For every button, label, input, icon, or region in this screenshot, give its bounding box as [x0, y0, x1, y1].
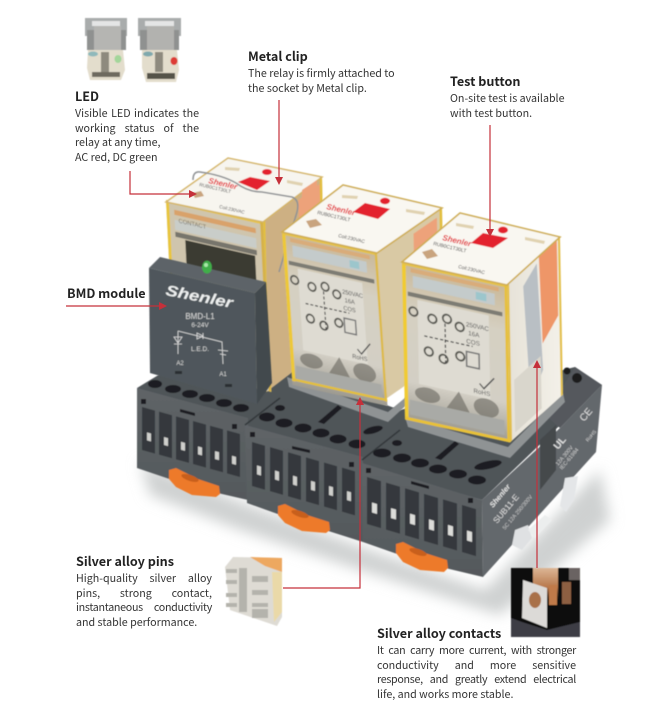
- relay 3 (front): RUB0C1T30LT: [433, 241, 467, 255]
- callout: silver alloy contacts: [377, 623, 576, 702]
- callout: BMD module: BMD module: [67, 283, 146, 302]
- BMD module: [149, 257, 272, 404]
- relay 3 front: RoHS: [473, 388, 490, 398]
- LED photos: green and red indicator relays: [85, 18, 181, 82]
- relay 3 (front): [402, 213, 565, 458]
- arrow: BMD module: [66, 302, 167, 310]
- callout: silver alloy pins: High-quality silver alloy: [76, 571, 212, 586]
- arrow: metal clip: [275, 100, 283, 185]
- relay 3 (front): Coil:230VAC: [458, 264, 486, 276]
- relay 2 (middle): RUB0C1T30LT: [317, 210, 351, 224]
- callout: LED: working status of the: [75, 121, 199, 136]
- callout: LED: Visible LED indicates the: [75, 106, 199, 121]
- BMD side: [255, 282, 272, 404]
- socket right side: CE: [578, 406, 595, 424]
- silver pins photo: [225, 557, 282, 626]
- callout: LED: relay at any time,: [75, 135, 161, 150]
- relay 2 (middle): [282, 185, 445, 422]
- white DIN rail clip: [512, 476, 578, 550]
- relay 2 front: 250VAC: [342, 289, 364, 300]
- relay 1 (back): Coil:230VAC: [219, 204, 246, 215]
- BMD printed labels: A1: [219, 372, 227, 378]
- module 1 front: [137, 380, 249, 500]
- relay 2 side: [377, 208, 445, 403]
- relay 2 front: [282, 232, 388, 406]
- socket right side: UL: [552, 435, 569, 452]
- soft ground shadow: [140, 462, 610, 615]
- socket top surface: [137, 367, 602, 500]
- callout: metal clip: The relay is firmly attached to: [248, 66, 395, 81]
- callout: silver alloy pins: Silver alloy pins: [76, 551, 174, 570]
- metal retaining clip: [193, 172, 298, 272]
- socket right side: 12A 300V: [555, 445, 575, 467]
- socket right side: RoHS: [585, 429, 599, 443]
- callout: metal clip: Metal clip: [248, 46, 308, 65]
- relay 1 front: CONTACT: [178, 219, 207, 231]
- callout: test button: On-site test is available: [450, 91, 565, 106]
- silver contacts photo: [511, 568, 580, 637]
- callout: silver alloy contacts: response, and greatly extend electrical: [377, 672, 576, 687]
- callout: test button: [450, 71, 565, 121]
- callout: test button: with test button.: [450, 106, 532, 121]
- arrow: LED: [130, 171, 197, 198]
- LED photo: AC red: [138, 18, 181, 82]
- BMD front: [149, 268, 257, 404]
- relay 1 front: [166, 200, 272, 392]
- relay 3 front: COS: [466, 338, 480, 348]
- socket base: three modules: [137, 367, 602, 577]
- relay 1 (back): RUB0C1T30LT: [199, 182, 232, 195]
- callout: metal clip: [248, 46, 395, 96]
- BMD printed labels: 6-24V: [191, 322, 209, 329]
- callout: silver alloy pins: [76, 551, 212, 630]
- callout: test button: Test button: [450, 71, 520, 90]
- relay 3 top: [402, 213, 560, 285]
- relay 3 front: [402, 262, 510, 442]
- socket right side: IEC-61984: [559, 447, 580, 471]
- LED photo: DC green: [85, 18, 127, 80]
- relay 3 socket foot: [405, 393, 565, 458]
- callout: LED: [75, 86, 199, 165]
- orange release clips: [169, 468, 448, 572]
- socket right side: 5C 12A 250/300V: [502, 494, 534, 531]
- relay 1 (back): [166, 158, 325, 392]
- callout: metal clip: the socket by Metal clip.: [248, 81, 367, 96]
- BMD printed labels: [164, 282, 236, 387]
- socket right side: SUB11-E: [491, 492, 521, 525]
- socket right side: Shenler: [488, 482, 513, 509]
- relay 3 front: 250VAC: [466, 321, 489, 333]
- module 3 front: [362, 430, 503, 577]
- callout: silver alloy contacts: conductivity and more sensitive: [377, 658, 576, 673]
- arrow: test button: [486, 125, 494, 237]
- green LED: [202, 260, 212, 274]
- callout: silver alloy contacts: It can carry more current, with stronger: [377, 643, 576, 658]
- BMD printed labels: L.E.D.: [191, 346, 209, 353]
- BMD printed labels: BMD-L1: [185, 312, 215, 321]
- BMD top: [149, 257, 266, 293]
- BMD printed labels: A2: [176, 361, 184, 367]
- relay 2 front: RoHS: [352, 354, 368, 363]
- callout: LED: LED: [75, 86, 99, 105]
- relay 2 socket foot: [287, 377, 412, 422]
- socket right side: [482, 367, 602, 577]
- relay 2 front: 16A: [345, 298, 355, 306]
- callout: silver alloy pins: pins, strong contact,: [76, 586, 212, 601]
- callout: silver alloy pins: instantaneous conductivity: [76, 600, 212, 615]
- relay 1 (back): Shenler: [208, 176, 239, 192]
- relay 3 side: [507, 237, 563, 442]
- callout: silver alloy contacts: life, and works more stable.: [377, 687, 513, 702]
- relay 3 (front): Shenler: [442, 233, 473, 249]
- module 2 front: [245, 398, 384, 542]
- relay 2 (middle): Coil:230VAC: [338, 233, 366, 245]
- arrow: silver alloy pins: [283, 397, 364, 588]
- callout: silver alloy contacts: Silver alloy contacts: [377, 623, 501, 642]
- arrow: silver alloy contacts: [533, 360, 541, 568]
- relay 3 front: 16A: [468, 330, 480, 340]
- callout: silver alloy pins: and stable performance.: [76, 615, 197, 630]
- relay 2 front: COS: [343, 306, 356, 315]
- relay 1 side: [263, 177, 325, 392]
- relay 1 top: [166, 158, 322, 222]
- BMD printed labels: Shenler: [164, 282, 236, 312]
- relay 2 (middle): Shenler: [326, 202, 357, 218]
- callout: LED: AC red, DC green: [75, 150, 158, 165]
- relay 2 top: [282, 185, 442, 253]
